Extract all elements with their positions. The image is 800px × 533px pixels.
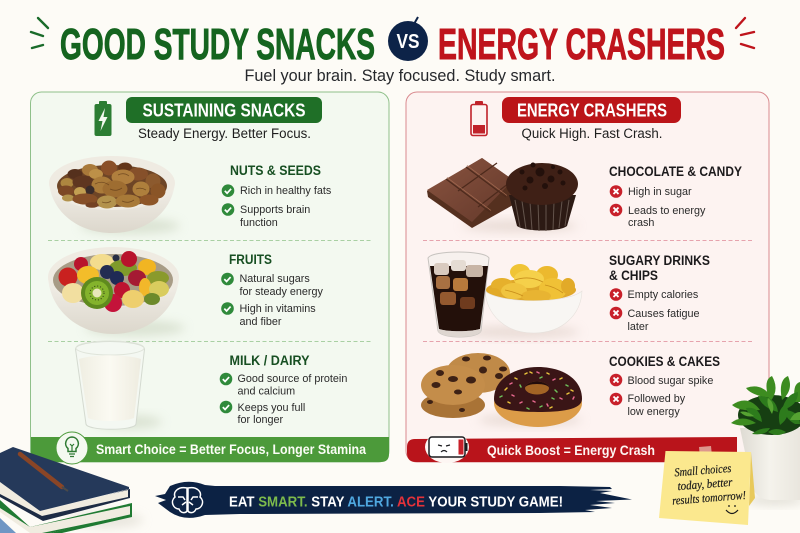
food: fruit bowl	[48, 247, 185, 336]
text: milk and dairy	[220, 353, 347, 426]
text: sugary drinks and chips: SUGARY DRINKS	[609, 253, 710, 268]
decoration: potted plant	[731, 376, 800, 505]
decoration: notebooks and pen	[0, 447, 143, 533]
cola glass	[428, 252, 489, 337]
note text: results tomorrow!	[672, 488, 746, 508]
lower blue cover	[0, 518, 16, 533]
text: fruits: FRUITS	[229, 252, 272, 267]
food: cola and chips	[428, 252, 582, 338]
text: fruits: Natural sugars	[240, 273, 310, 285]
footer bar: quick boost: Quick Boost = Energy Crash	[487, 443, 655, 458]
text: nuts and seeds: function	[240, 217, 278, 229]
food: cookies and donut	[421, 353, 582, 427]
accent ticks left	[31, 18, 48, 48]
text: fruits: High in vitamins	[240, 303, 316, 315]
text: nuts and seeds: Supports brain	[240, 204, 310, 216]
panel: energy crashers	[406, 92, 769, 463]
icon: light bulb	[56, 432, 88, 464]
text: chocolate and candy: CHOCOLATE & CANDY	[609, 164, 742, 179]
icon: cross	[610, 374, 622, 386]
text: fruits: for steady energy	[240, 286, 324, 298]
banner: slogan: EAT SMART. STAY ALERT. ACE YOUR STUDY GAME!	[229, 494, 563, 510]
heading pill	[502, 97, 681, 123]
footer bar: smart choice: Smart Choice = Better Focus, Longer Stamina	[96, 442, 366, 457]
text: chocolate and candy: crash	[628, 217, 654, 229]
icon: check	[220, 373, 232, 385]
heading pill: SUSTAINING SNACKS	[142, 100, 306, 120]
green notebook	[0, 500, 132, 533]
icon: cross	[610, 204, 622, 216]
panel: sustaining snacks	[30, 92, 389, 464]
text: sugary drinks and chips: later	[628, 321, 649, 333]
food: chocolate and muffin	[427, 158, 578, 232]
chocolate bar	[427, 158, 513, 228]
title header	[31, 17, 754, 85]
heading pill: ENERGY CRASHERS	[517, 100, 667, 120]
text: nuts and seeds: Rich in healthy fats	[240, 185, 332, 197]
tagline: Quick High. Fast Crash.	[522, 126, 662, 141]
accent ticks right	[736, 18, 754, 48]
navy notebook	[0, 484, 130, 521]
icon: green battery	[94, 101, 112, 136]
text: sugary drinks and chips	[609, 253, 710, 333]
text: chocolate and candy: High in sugar	[628, 186, 692, 198]
pen	[20, 454, 62, 487]
icon: low red battery	[471, 101, 487, 136]
muffin	[506, 162, 578, 231]
text: nuts and seeds	[222, 163, 332, 229]
icon: check	[222, 184, 234, 197]
icon: sad battery	[425, 431, 469, 463]
icon: cross	[610, 393, 622, 405]
footer bar: smart choice	[31, 432, 389, 464]
chip bowl	[485, 291, 582, 333]
text: chocolate and candy: Leads to energy	[628, 205, 706, 217]
text: cookies and cakes: COOKIES & CAKES	[609, 354, 720, 369]
dashed dividers	[48, 240, 372, 342]
icon: cross	[610, 307, 622, 319]
note text: Small choices	[674, 461, 732, 479]
icon: brain	[172, 488, 203, 513]
vs badge: VS	[396, 31, 420, 53]
icon: check	[221, 273, 234, 285]
text: chocolate and candy	[609, 164, 742, 229]
subtitle: Fuel your brain. Stay focused. Study smart.	[244, 66, 556, 85]
text: cookies and cakes: Followed by	[628, 393, 686, 405]
text: cookies and cakes: low energy	[628, 406, 680, 418]
text: milk and dairy: for longer	[238, 414, 284, 426]
icon: check	[220, 401, 232, 413]
leaves	[731, 376, 800, 435]
note text: today, better	[677, 475, 733, 493]
note text	[669, 460, 746, 508]
icon: cross	[610, 185, 622, 198]
icon: check	[222, 203, 234, 216]
banner: slogan	[155, 482, 632, 518]
text: milk and dairy: MILK / DAIRY	[230, 353, 310, 368]
text: sugary drinks and chips: & CHIPS	[609, 268, 658, 283]
icon: smiley	[726, 505, 738, 514]
heading pill	[126, 97, 322, 123]
text: nuts and seeds: NUTS & SEEDS	[230, 163, 321, 178]
text: milk and dairy: Keeps you full	[238, 402, 305, 414]
pot	[740, 428, 800, 500]
text: cookies and cakes: Blood sugar spike	[628, 375, 713, 387]
food: nuts bowl	[49, 156, 180, 234]
text: sugary drinks and chips: Causes fatigue	[628, 308, 700, 320]
food: glass of milk	[76, 341, 162, 429]
text: cookies and cakes	[609, 354, 720, 418]
icon: cross	[610, 288, 622, 301]
donut	[494, 367, 582, 427]
cookies	[421, 353, 510, 418]
sticky note	[659, 446, 755, 525]
dashed dividers	[423, 240, 753, 342]
text: sugary drinks and chips: Empty calories	[628, 289, 699, 301]
title: good study snacks: GOOD STUDY SNACKS	[60, 20, 375, 69]
text: fruits: and fiber	[240, 316, 282, 328]
text: milk and dairy: Good source of protein	[238, 373, 347, 385]
icon: check	[221, 302, 234, 315]
tagline: Steady Energy. Better Focus.	[138, 126, 311, 141]
chips	[486, 264, 576, 302]
text: fruits	[221, 252, 324, 328]
text: milk and dairy: and calcium	[238, 386, 295, 398]
vs badge	[388, 17, 428, 61]
footer bar: quick boost	[407, 431, 737, 463]
